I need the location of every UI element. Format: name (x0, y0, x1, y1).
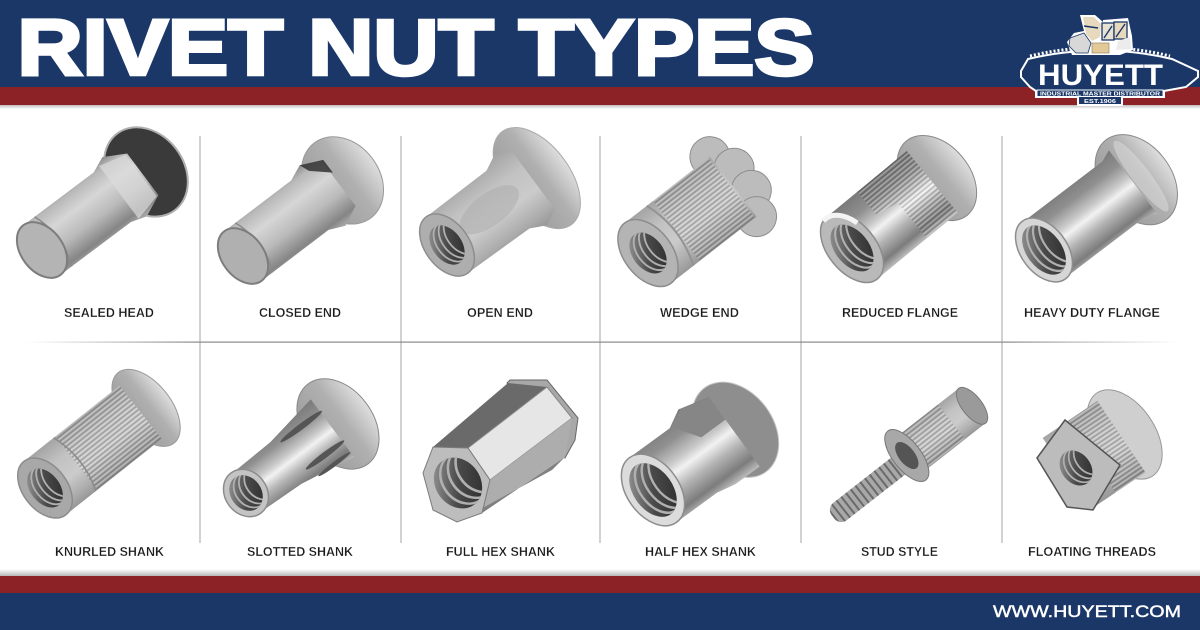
nut: knurled shank (0, 357, 194, 537)
title: RIVET NUT TYPES (18, 2, 814, 91)
nut: closed end (198, 121, 400, 306)
logo established date: EST.1906 (1084, 99, 1116, 105)
logo wordmark: HUYETT (1038, 59, 1163, 92)
label: half hex shank: HALF HEX SHANK (645, 545, 756, 559)
logo plaque (1021, 50, 1198, 105)
nut: open end (395, 112, 598, 305)
nut: floating threads (1037, 376, 1178, 515)
label: open end: OPEN END (467, 306, 533, 320)
label: full hex shank: FULL HEX SHANK (446, 545, 555, 559)
nut: full hex shank (423, 380, 578, 522)
icon: mascot carrying crates (1067, 15, 1133, 55)
footer band (0, 569, 1200, 630)
label: stud style: STUD STYLE (861, 545, 938, 559)
label: knurled shank: KNURLED SHANK (55, 545, 164, 559)
label: wedge end: WEDGE END (660, 306, 739, 320)
nut: sealed head (0, 111, 205, 301)
footer url: WWW.HUYETT.COM (993, 603, 1181, 621)
nut: heavy duty flange (995, 119, 1194, 304)
nut: stud style (812, 374, 998, 539)
label: reduced flange: REDUCED FLANGE (842, 306, 958, 320)
nut: slotted shank (199, 363, 396, 546)
label: slotted shank: SLOTTED SHANK (247, 545, 353, 559)
label: sealed head: SEALED HEAD (64, 306, 154, 320)
label: closed end: CLOSED END (259, 306, 341, 320)
logo: Huyett (1021, 15, 1198, 105)
logo tagline: INDUSTRIAL MASTER DISTRIBUTOR (1040, 91, 1160, 97)
logo tagline (1037, 90, 1163, 97)
nut: wedge end (593, 121, 794, 314)
label: heavy duty flange: HEAVY DUTY FLANGE (1024, 306, 1160, 320)
nut: reduced flange (803, 120, 993, 300)
header band (0, 0, 1200, 109)
nut: half hex shank (601, 365, 797, 547)
label: floating threads: FLOATING THREADS (1028, 545, 1156, 559)
